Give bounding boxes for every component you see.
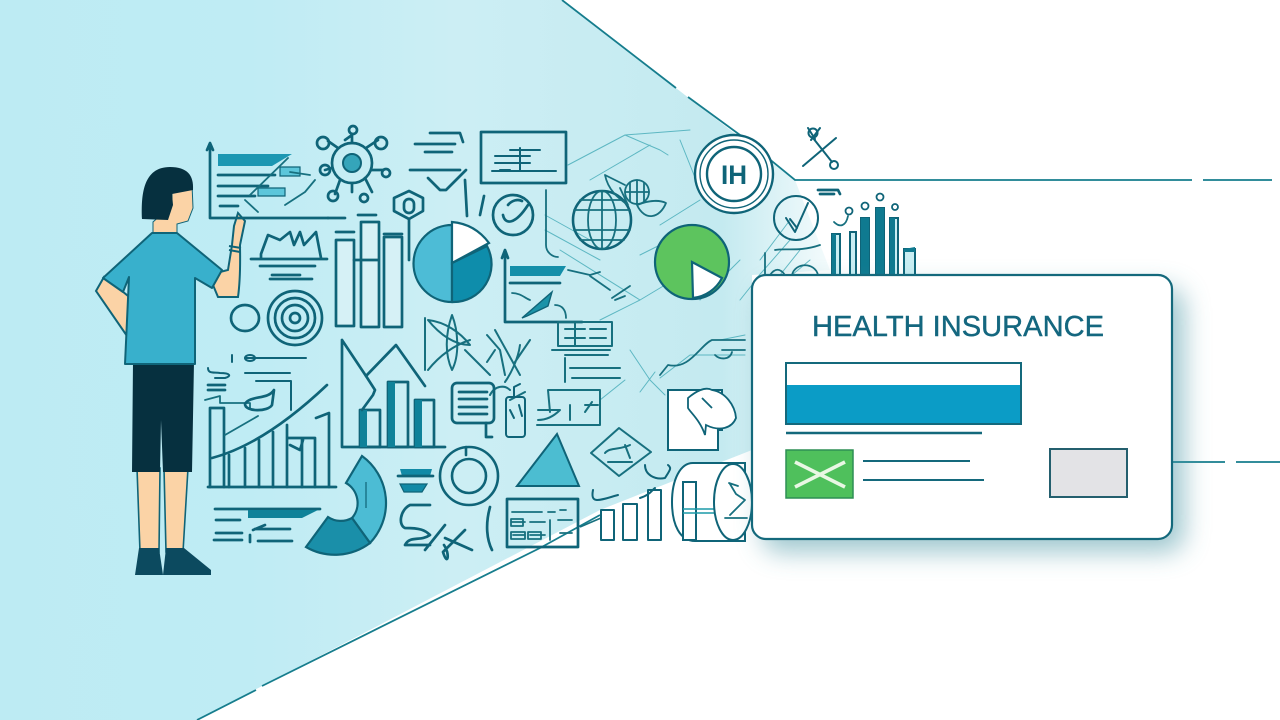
icon: small bars bottom: [592, 465, 670, 540]
icon: triangle: [517, 434, 579, 486]
shorts: [132, 362, 194, 472]
person: [96, 167, 245, 575]
small bar chart: [336, 215, 402, 327]
panel: health insurance card: [752, 275, 1172, 539]
icon: flower and branches: [425, 315, 530, 400]
faint network lines in the middle: [545, 130, 810, 400]
grey photo box: [1050, 449, 1127, 497]
icon: lines bottom left: [214, 509, 320, 542]
detail lines: [863, 461, 984, 480]
icon: bottle: [506, 384, 525, 437]
icon: text lines cluster: [410, 133, 484, 216]
icon: IH badge: IH: [721, 160, 747, 190]
icon: map card: [660, 340, 745, 450]
icon: diamond tag: [591, 428, 651, 476]
icon: bar chart with axis top left: [207, 143, 345, 218]
left arm: [96, 277, 133, 336]
ring icon: [440, 447, 498, 505]
shirt: [103, 233, 222, 364]
pie chart: green: [655, 225, 729, 299]
icon: lines above bar chart: [208, 355, 306, 410]
icon: arrow chart: [502, 250, 630, 322]
pie chart: blue: [414, 222, 492, 302]
icon: capsule with S: [672, 463, 752, 541]
icon: lollipop bar chart: [832, 194, 915, 276]
icon: data table sketch: [507, 499, 601, 547]
icon: IH badge: [695, 135, 773, 213]
icon: crossed tools: [803, 128, 838, 169]
small mark above check: [818, 190, 840, 194]
icon: rising bar chart with trend: [205, 385, 336, 487]
icon: bracket line: [546, 190, 558, 257]
blue banner: [786, 363, 1021, 424]
green check box: [786, 450, 853, 498]
legs: [137, 468, 160, 552]
heading: HEALTH INSURANCE: [812, 311, 1104, 343]
icon: document data block: [552, 322, 620, 382]
icon: check circle right: [774, 196, 818, 240]
underline: [786, 432, 982, 434]
icon: check circle: [493, 195, 533, 235]
shoes: [135, 548, 163, 575]
hair: [142, 167, 193, 220]
icon: small scribbles behind card: [765, 245, 820, 278]
wrist band: [229, 246, 241, 252]
icon: laptop sketch: [537, 390, 600, 425]
card shadow: [762, 288, 1184, 552]
icon: document note: [452, 383, 494, 437]
icon: globe with small globe and leaves: [573, 175, 666, 249]
background light-blue cone: [0, 0, 830, 720]
icon: virus network: [317, 126, 390, 202]
icon: target rings: [231, 291, 322, 345]
right arm: [213, 213, 245, 297]
icon: mountain line chart: [251, 232, 327, 279]
icon: segmented donut: [306, 456, 386, 555]
panel: notes box: [481, 132, 566, 183]
neck and face: [153, 184, 193, 236]
icon: hexagon nut: [394, 191, 423, 260]
icon: stacked plate and scribbles: [398, 469, 492, 559]
icon: house-shaped chart: [342, 340, 445, 447]
